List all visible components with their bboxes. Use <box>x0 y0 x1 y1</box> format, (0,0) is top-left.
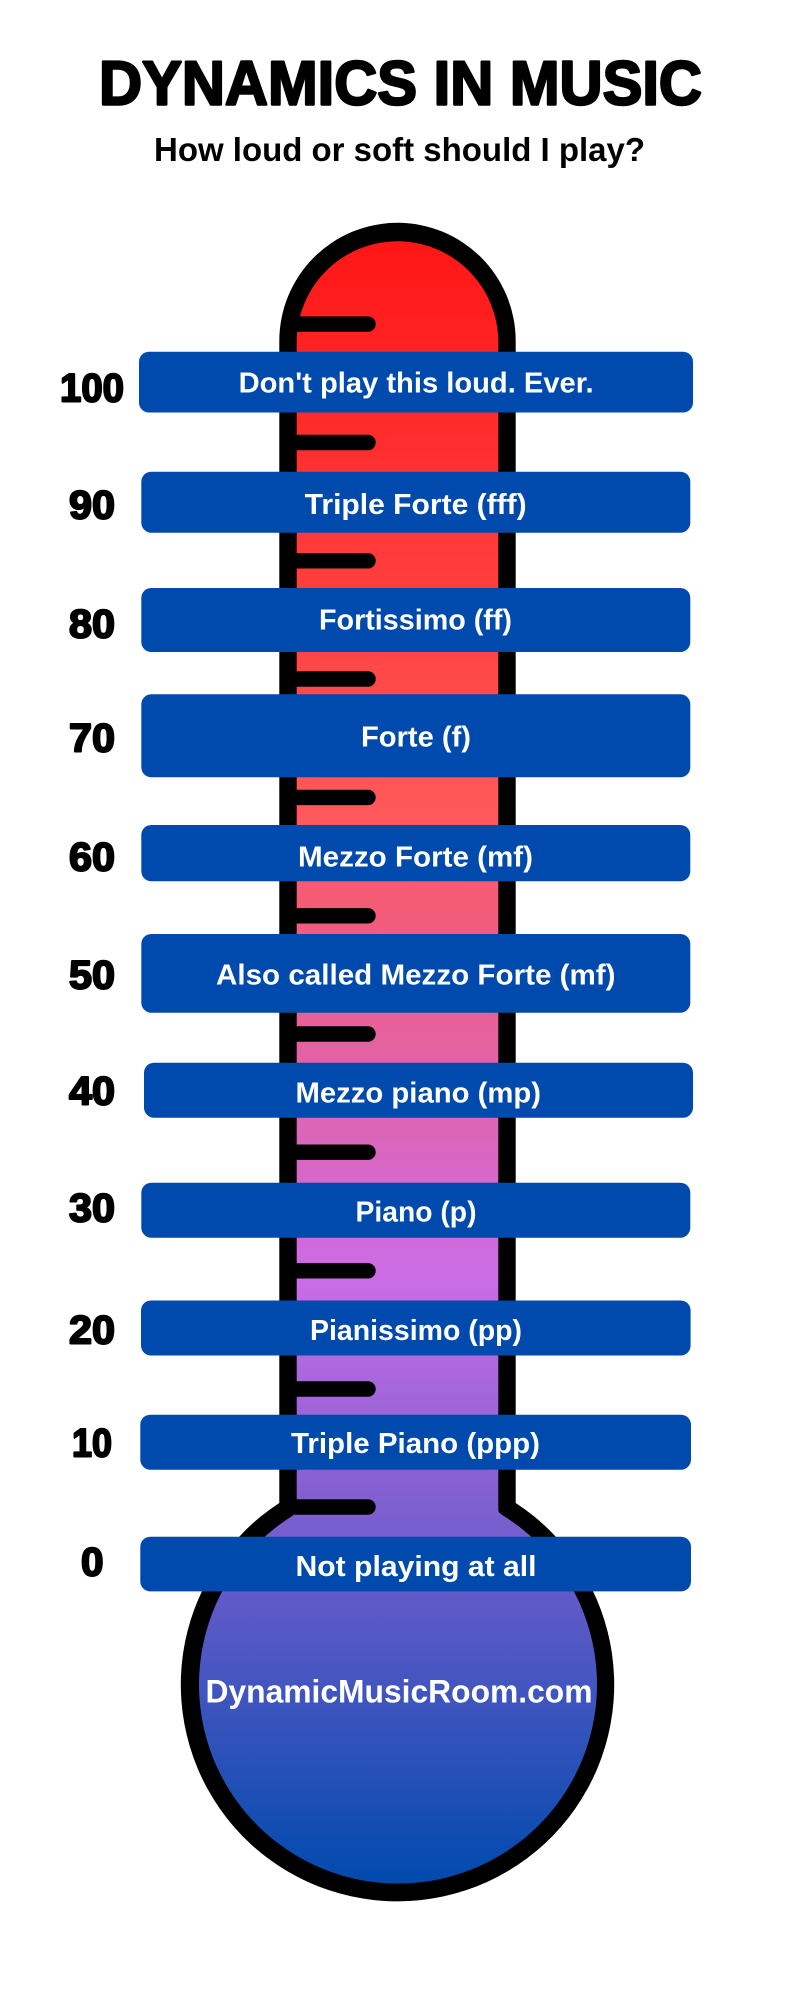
number 70: 70 <box>69 716 115 760</box>
number 60: 60 <box>69 835 115 879</box>
level 40 label: Mezzo piano (mp) <box>296 1077 541 1109</box>
level 100 label <box>139 352 693 412</box>
title: DYNAMICS IN MUSIC <box>99 50 702 118</box>
number 20: 20 <box>69 1309 115 1353</box>
level 0 label: Not playing at all <box>296 1551 536 1583</box>
level 80 label <box>141 588 690 652</box>
scale ticks <box>285 316 376 1515</box>
scale numbers <box>60 366 124 1585</box>
level 20 label <box>141 1300 691 1356</box>
website text in bulb: DynamicMusicRoom.com <box>206 1674 592 1710</box>
level 80 label: Fortissimo (ff) <box>319 604 512 636</box>
level 70 label: Forte (f) <box>361 722 471 754</box>
number 90: 90 <box>69 483 115 527</box>
number 40: 40 <box>69 1069 115 1113</box>
level 40 label <box>144 1063 693 1118</box>
level 30 label <box>141 1183 690 1238</box>
number 30: 30 <box>69 1186 115 1230</box>
level 50 label: Also called Mezzo Forte (mf) <box>216 959 616 991</box>
level 50 label <box>141 934 690 1013</box>
number 10: 10 <box>72 1421 112 1465</box>
level 60 label: Mezzo Forte (mf) <box>298 842 533 874</box>
thermometer <box>181 223 614 1901</box>
level 100 label: Don't play this loud. Ever. <box>239 367 594 399</box>
level 10 label <box>140 1415 691 1470</box>
number 80: 80 <box>69 602 115 646</box>
subtitle: How loud or soft should I play? <box>154 131 645 168</box>
thermometer outline <box>181 223 614 1901</box>
thermometer gradient fill <box>199 241 597 1884</box>
level 60 label <box>141 825 690 881</box>
level 10 label: Triple Piano (ppp) <box>291 1428 540 1460</box>
level 70 label <box>141 694 690 777</box>
level 90 label: Triple Forte (fff) <box>305 489 527 521</box>
level 90 label <box>141 472 690 533</box>
number 0: 0 <box>81 1541 104 1585</box>
level 0 label <box>140 1537 691 1591</box>
level 20 label: Pianissimo (pp) <box>310 1315 522 1347</box>
level 30 label: Piano (p) <box>356 1197 476 1229</box>
number 50: 50 <box>69 953 115 997</box>
number 100: 100 <box>60 366 124 410</box>
